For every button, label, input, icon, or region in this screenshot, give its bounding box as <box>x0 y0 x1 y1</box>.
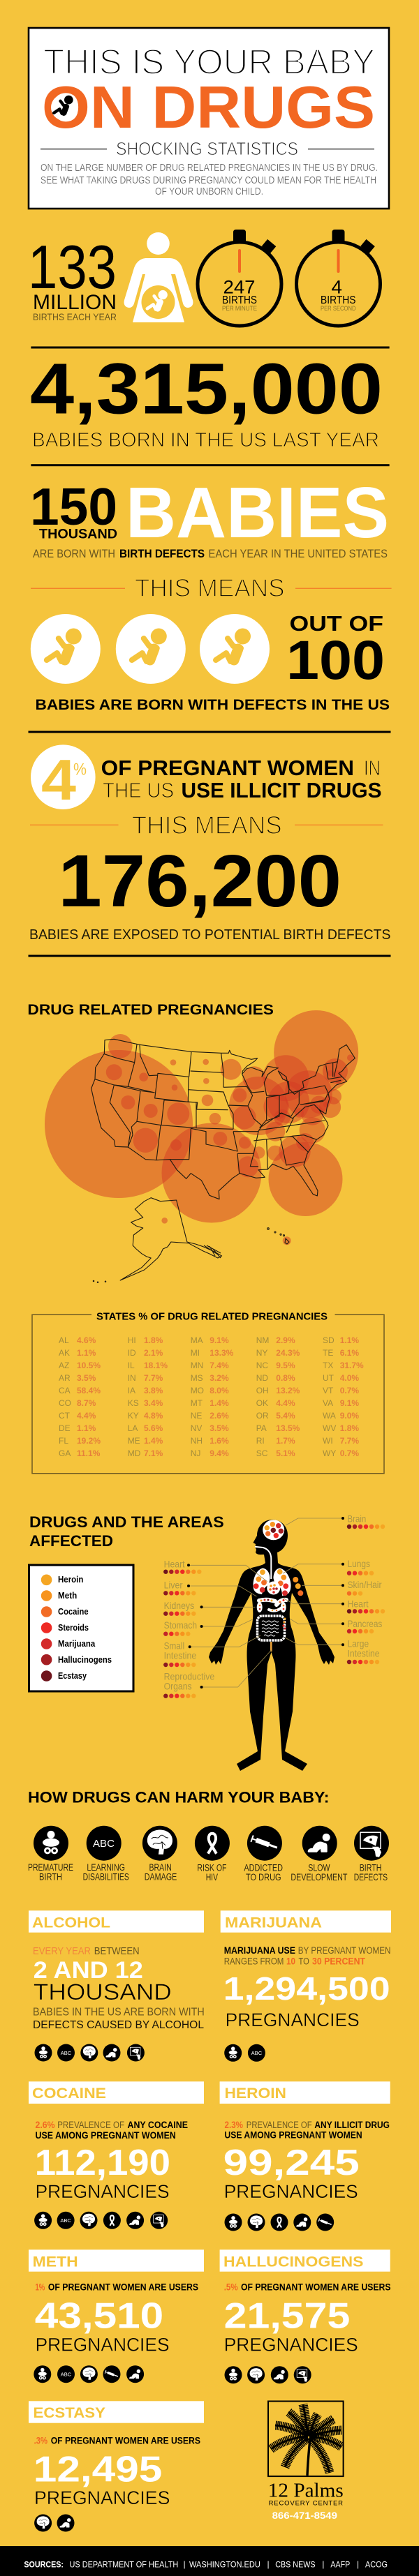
body figure with organs <box>209 1520 335 1771</box>
heading: this means: THIS MEANS <box>135 574 285 602</box>
stat: 150 thousand babies: BABIES <box>126 472 389 553</box>
panel: alcohol: DEFECTS CAUSED BY ALCOHOL <box>33 2019 204 2031</box>
column 1: 1.1% <box>77 1423 96 1433</box>
stat: out of 100: 100 <box>286 629 385 691</box>
column 4: 13.5% <box>276 1423 300 1433</box>
column 1: 11.1% <box>77 1448 101 1458</box>
column 3: NJ <box>191 1448 200 1458</box>
icon: birth defects <box>354 1826 389 1882</box>
panel: heroin: PREVALENCE OF <box>247 2120 312 2130</box>
icon: addicted to drug <box>244 1826 283 1882</box>
column 1: AK <box>59 1348 70 1358</box>
heading: drugs and the areas affected <box>29 1513 224 1550</box>
logo: 12 Palms Recovery Center: RECOVERY CENTER <box>269 2500 343 2508</box>
panel: marijuana: RANGES FROM <box>224 1956 284 1966</box>
icon: pregnant woman <box>124 232 193 322</box>
column 4: NC <box>256 1361 268 1370</box>
column 4: 1.7% <box>276 1436 295 1446</box>
lungs <box>253 1568 291 1596</box>
icon: premature birth: PREMATURE <box>28 1862 73 1873</box>
caption: babies born with defects: BABIES ARE BORN WITH DEFECTS IN THE US <box>35 696 390 713</box>
harm icons: ABC <box>61 2050 71 2056</box>
column 3: 9.1% <box>210 1335 229 1345</box>
harm icons <box>34 2515 74 2531</box>
stopwatch: 247 births per minute: PER MINUTE <box>222 305 257 313</box>
heart <box>267 1581 280 1595</box>
intro paragraph: OF YOUR UNBORN CHILD. <box>155 186 263 197</box>
callout: right side organ labels: Brain <box>348 1513 366 1525</box>
icon: birth defects: BIRTH <box>360 1863 381 1873</box>
icon: learning disabilities <box>83 1826 129 1882</box>
callout: right side organ labels: Large <box>348 1638 369 1649</box>
panel: drug legend: Heroin <box>58 1575 83 1585</box>
panel: ecstasy: OF PREGNANT WOMEN ARE USERS <box>51 2436 200 2446</box>
panel: drug legend: Marijuana <box>58 1639 96 1649</box>
column 2: KY <box>128 1411 139 1421</box>
icon: risk of HIV <box>195 1826 230 1882</box>
column 4: PA <box>256 1423 267 1433</box>
stopwatch: 247 births per minute: 247 <box>223 277 256 298</box>
statement: pregnant women use illicit drugs: OF PREGNANT WOMEN <box>101 756 354 780</box>
caption: birth defects: BIRTH DEFECTS <box>119 548 205 560</box>
heading: drugs and the areas affected: DRUGS AND THE AREAS <box>29 1513 224 1531</box>
icon: learning disabilities: ABC <box>93 1839 115 1850</box>
logo: 12 Palms Recovery Center <box>268 2402 344 2521</box>
column 5: WA <box>323 1411 336 1421</box>
panel: ecstasy: ECSTASY <box>34 2405 105 2421</box>
callout: left side organ labels: Reproductive <box>164 1671 214 1682</box>
panel: alcohol: BETWEEN <box>94 1945 140 1957</box>
column 5: WI <box>323 1436 333 1446</box>
panel: marijuana: 30 PERCENT <box>312 1956 366 1966</box>
column 3: 13.3% <box>210 1348 234 1358</box>
column 5: VA <box>323 1398 333 1408</box>
panel: marijuana <box>221 1910 391 2062</box>
panel: marijuana: PREGNANCIES <box>226 2009 360 2030</box>
callout: right side organ labels <box>341 1513 385 1664</box>
panel: alcohol: BABIES IN THE US ARE BORN WITH <box>33 2007 205 2019</box>
footer: sources: | <box>267 2559 270 2569</box>
stopwatch: 247 births per minute: BIRTHS <box>222 294 257 306</box>
column 2: 2.1% <box>144 1348 163 1358</box>
column 5: WY <box>323 1448 336 1458</box>
panel: ecstasy <box>29 2401 204 2531</box>
column 1: CO <box>59 1398 71 1408</box>
callout lines <box>189 1518 343 1687</box>
column 4: OR <box>256 1411 269 1421</box>
panel: state percentages table <box>32 1311 384 1474</box>
panel: drug legend: Meth <box>58 1591 77 1601</box>
panel: hallucinogens: HALLUCINOGENS <box>223 2254 363 2270</box>
column 3: 9.4% <box>210 1448 229 1458</box>
stat: 150 thousand babies: 150 <box>30 477 117 536</box>
panel: meth: OF PREGNANT WOMEN ARE USERS <box>48 2282 198 2293</box>
phone number: 866-471-8549 <box>272 2510 337 2521</box>
panel: heroin: PREGNANCIES <box>224 2181 358 2202</box>
column 5: WV <box>323 1423 336 1433</box>
column 4: OH <box>256 1386 269 1395</box>
column 1: 1.1% <box>77 1348 96 1358</box>
panel: cocaine: ANY COCAINE <box>127 2120 188 2130</box>
callout: left side organ labels <box>163 1559 214 1698</box>
stat: 4,315,000 babies: BABIES BORN IN THE US LAST YEAR <box>32 429 379 451</box>
logo wordmark: 12 Palms <box>268 2480 344 2501</box>
stat: 150 thousand babies: THOUSAND <box>39 527 117 541</box>
column 3: 3.5% <box>210 1423 229 1433</box>
column 1: AR <box>59 1373 71 1383</box>
column 5: 4.0% <box>340 1373 359 1383</box>
footer: sources <box>0 2546 419 2576</box>
icon: brain damage <box>142 1826 177 1882</box>
panel: cocaine: USE AMONG PREGNANT WOMEN <box>35 2130 176 2141</box>
panel: marijuana: TO <box>299 1956 309 1966</box>
column 1: GA <box>59 1448 71 1458</box>
icon: brain damage: DAMAGE <box>145 1871 177 1882</box>
harm icons <box>34 2212 168 2229</box>
icon: learning disabilities: LEARNING <box>87 1862 125 1873</box>
column 4: SC <box>256 1448 268 1458</box>
panel: cocaine: COCAINE <box>32 2085 106 2102</box>
icon: slow development: DEVELOPMENT <box>291 1872 348 1882</box>
footer: sources: | <box>183 2559 186 2569</box>
column 3: MI <box>191 1348 200 1358</box>
callout: left side organ labels: Liver <box>164 1580 183 1591</box>
stat: out of 100: OUT OF <box>289 611 383 636</box>
column 4: 5.1% <box>276 1448 295 1458</box>
panel: hallucinogens: PREGNANCIES <box>224 2334 358 2355</box>
caption: birth defects: ARE BORN WITH <box>33 548 115 560</box>
column 3: MN <box>191 1361 203 1370</box>
callout: right side organ labels: Intestine <box>348 1647 380 1658</box>
column 4: 2.9% <box>276 1335 295 1345</box>
harm icons: ABC <box>60 2217 71 2224</box>
panel: cocaine: 112,190 <box>35 2143 170 2183</box>
Alaska and Hawaii outlines <box>93 1198 289 1282</box>
panel: ecstasy: 12,495 <box>34 2450 162 2490</box>
panel: marijuana: BY PREGNANT WOMEN <box>298 1945 391 1956</box>
harm icons <box>34 2365 144 2383</box>
column 2: 3.4% <box>144 1398 163 1408</box>
heading: how drugs can harm your baby: HOW DRUGS CAN HARM YOUR BABY: <box>28 1788 330 1806</box>
column 1: FL <box>59 1436 68 1446</box>
callout: right side organ labels: Lungs <box>348 1558 370 1569</box>
title line: on drugs: ON DRUGS <box>42 75 375 141</box>
panel: heroin: 2.3% <box>225 2120 243 2130</box>
panel: heroin: 99,245 <box>223 2143 360 2183</box>
brain <box>263 1520 284 1540</box>
footer: sources: WASHINGTON.EDU <box>189 2559 260 2569</box>
column 2: 3.8% <box>144 1386 163 1395</box>
column 5: 31.7% <box>340 1361 364 1370</box>
callout: left side organ labels: Intestine <box>164 1650 196 1661</box>
title line: this is your baby: THIS IS YOUR BABY <box>43 42 375 82</box>
footer: sources: ACOG <box>365 2559 388 2569</box>
stat: 133 million births each year: MILLION <box>33 291 117 314</box>
panel: meth: 43,510 <box>35 2296 163 2337</box>
panel: hallucinogens: OF PREGNANT WOMEN ARE USERS <box>241 2282 391 2293</box>
column 2: 5.6% <box>144 1423 163 1433</box>
baby circles <box>31 614 270 684</box>
logo frame <box>268 2402 344 2476</box>
column 3: 1.4% <box>210 1398 229 1408</box>
statement: pregnant women use illicit drugs: THE US <box>103 779 174 802</box>
icon: slow development <box>291 1826 348 1882</box>
panel: hallucinogens: 21,575 <box>224 2296 350 2337</box>
caption: babies exposed: BABIES ARE EXPOSED TO POTENTIAL BIRTH DEFECTS <box>29 927 391 943</box>
column 5: 1.8% <box>340 1423 359 1433</box>
panel: ecstasy: .3% <box>34 2436 47 2446</box>
panel: cocaine <box>29 2081 204 2229</box>
intro paragraph <box>41 162 378 197</box>
callout: right side organ labels: Heart <box>348 1598 369 1609</box>
column 5: 7.7% <box>340 1436 359 1446</box>
column 4: 9.5% <box>276 1361 295 1370</box>
windpipe <box>255 1547 271 1579</box>
column 5: 9.1% <box>340 1398 359 1408</box>
column 2: ID <box>128 1348 136 1358</box>
stat: 133 million births each year <box>28 232 117 322</box>
stat: 176,200: 176,200 <box>58 840 341 922</box>
column 2: IN <box>128 1373 136 1383</box>
badge: 4 percent <box>31 744 96 812</box>
stopwatch: 4 births per second: 4 <box>331 277 342 298</box>
badge: 4 percent: 4 <box>41 747 76 812</box>
icon: baby in the letter O <box>54 96 73 114</box>
column 2: IL <box>128 1361 135 1370</box>
icon: slow development: SLOW <box>308 1863 330 1873</box>
harm icons <box>35 2044 145 2061</box>
panel: drug legend: Steroids <box>58 1623 89 1633</box>
harm icons <box>225 2213 334 2231</box>
panel: marijuana: 1,294,500 <box>223 1970 390 2007</box>
header panel <box>29 28 389 209</box>
column 5: 0.7% <box>340 1386 359 1395</box>
column 5: TE <box>323 1348 333 1358</box>
icon row: harms <box>28 1826 389 1882</box>
icon: addicted to drug: ADDICTED <box>244 1863 283 1873</box>
column 4: NM <box>256 1335 269 1345</box>
icon: risk of HIV: HIV <box>206 1872 218 1882</box>
column 4: 5.4% <box>276 1411 295 1421</box>
icon: risk of HIV: RISK OF <box>197 1863 226 1873</box>
footer: sources: | <box>357 2559 359 2569</box>
callout: left side organ labels: Heart <box>164 1559 185 1570</box>
column 4 <box>256 1335 300 1458</box>
statement: pregnant women use illicit drugs: USE ILLICIT DRUGS <box>182 779 381 802</box>
column 2: MD <box>128 1448 141 1458</box>
column 5: 9.0% <box>340 1411 359 1421</box>
column 4: 4.4% <box>276 1398 295 1408</box>
stopwatch: 247 births per minute <box>198 230 281 326</box>
column 3: NV <box>191 1423 202 1433</box>
panel: hallucinogens <box>220 2249 391 2383</box>
subtitle: shocking statistics: SHOCKING STATISTICS <box>116 138 298 159</box>
panel: marijuana: MARIJUANA USE <box>224 1945 295 1956</box>
icon: addicted to drug: TO DRUG <box>246 1872 281 1882</box>
callout: right side organ labels: Skin/Hair <box>348 1579 382 1590</box>
panel: alcohol: THOUSAND <box>34 1979 172 2005</box>
column 2: 4.8% <box>144 1411 163 1421</box>
footer: sources: SOURCES: <box>24 2559 64 2569</box>
column 3: MA <box>191 1335 203 1345</box>
panel: cocaine: 2.6% <box>35 2120 54 2130</box>
icon: learning disabilities: DISABILITIES <box>83 1871 129 1882</box>
stopwatch: 4 births per second: BIRTHS <box>321 294 356 306</box>
heading: drugs and the areas affected: AFFECTED <box>29 1532 113 1550</box>
bubbles by state <box>45 1010 358 1245</box>
column 5: 1.1% <box>340 1335 359 1345</box>
statement: pregnant women use illicit drugs <box>101 756 381 802</box>
column 5: TX <box>323 1361 333 1370</box>
column 2: 1.8% <box>144 1335 163 1345</box>
panel: drug legend: Cocaine <box>58 1607 89 1617</box>
footer: sources: AAFP <box>330 2559 350 2569</box>
callout: left side organ labels: Organs <box>164 1681 192 1692</box>
heading: this means: THIS MEANS <box>132 811 282 839</box>
callout: left side organ labels: Stomach <box>164 1619 197 1631</box>
panel: cocaine: PREVALENCE OF <box>57 2120 124 2130</box>
column 5: UT <box>323 1373 335 1383</box>
column 4: ND <box>256 1373 268 1383</box>
panel: cocaine: PREGNANCIES <box>35 2181 170 2202</box>
column 5: VT <box>323 1386 334 1395</box>
column 3: 7.4% <box>210 1361 229 1370</box>
column 3: MO <box>191 1386 204 1395</box>
stopwatch: 4 births per second <box>296 230 380 326</box>
callout: right side organ labels: Pancreas <box>348 1618 382 1629</box>
column 1: 4.4% <box>77 1411 96 1421</box>
column 1 <box>59 1335 101 1458</box>
column 3: MT <box>191 1398 203 1408</box>
column 4: RI <box>256 1436 265 1446</box>
stopwatch: 4 births per second: PER SECOND <box>321 305 356 313</box>
panel: heroin: USE AMONG PREGNANT WOMEN <box>225 2129 362 2141</box>
column 3: 3.2% <box>210 1373 229 1383</box>
panel: heroin: ANY ILLICIT DRUG <box>314 2120 390 2130</box>
caption: birth defects <box>33 548 388 560</box>
icon: brain damage: BRAIN <box>149 1862 172 1873</box>
column 5: SD <box>323 1335 335 1345</box>
column 5: 0.7% <box>340 1448 359 1458</box>
callout: left side organ labels: Small <box>164 1640 184 1651</box>
panel: alcohol: EVERY YEAR <box>33 1945 91 1957</box>
panel: marijuana: MARIJUANA <box>225 1915 322 1931</box>
column 1: 58.4% <box>77 1386 101 1395</box>
panel: meth <box>29 2249 204 2383</box>
stat: 133 million births each year: BIRTHS EACH YEAR <box>33 311 117 322</box>
column 2: 18.1% <box>144 1361 168 1370</box>
harm icons: ABC <box>61 2371 71 2377</box>
panel: meth: METH <box>33 2254 78 2270</box>
panel: hallucinogens: .5% <box>224 2282 238 2293</box>
state outlines <box>91 1039 355 1199</box>
column 3: 1.6% <box>210 1436 229 1446</box>
column 1: DE <box>59 1423 71 1433</box>
stat: 4,315,000 babies: 4,315,000 <box>30 349 383 428</box>
column 5: 6.1% <box>340 1348 359 1358</box>
icon: premature birth: BIRTH <box>39 1871 62 1882</box>
table title: STATES % OF DRUG RELATED PREGNANCIES <box>96 1311 328 1323</box>
panel: marijuana: 10 <box>286 1956 295 1966</box>
column 2: HI <box>128 1335 136 1345</box>
column 3: NH <box>191 1436 203 1446</box>
panel: alcohol: 2 AND 12 <box>34 1957 143 1984</box>
liver, stomach, kidneys and pancreas <box>257 1599 286 1612</box>
column 1: 4.6% <box>77 1335 96 1345</box>
skin dots on arm <box>293 1577 303 1596</box>
harm icons: ABC <box>251 2050 262 2056</box>
column 1: CA <box>59 1386 71 1395</box>
panel: meth: 1% <box>35 2282 45 2293</box>
panel: alcohol <box>29 1910 205 2061</box>
column 3: 2.6% <box>210 1411 229 1421</box>
column 4: 0.8% <box>276 1373 295 1383</box>
footer: sources: | <box>322 2559 324 2569</box>
footer: sources: US DEPARTMENT OF HEALTH <box>70 2559 178 2569</box>
column 2: KS <box>128 1398 139 1408</box>
column 1: 8.7% <box>77 1398 96 1408</box>
column 2: LA <box>128 1423 138 1433</box>
column 4: NY <box>256 1348 267 1358</box>
icon: birth defects: DEFECTS <box>354 1872 388 1882</box>
panel: drug legend <box>29 1565 133 1691</box>
harm icons <box>225 2366 311 2383</box>
column 1: AL <box>59 1335 69 1345</box>
column 3 <box>191 1335 234 1458</box>
harm icons <box>224 2044 265 2062</box>
column 4: 24.3% <box>276 1348 300 1358</box>
column 3: 8.0% <box>210 1386 229 1395</box>
column 1: CT <box>59 1411 71 1421</box>
column 2: 7.7% <box>144 1373 163 1383</box>
column 2: 7.1% <box>144 1448 163 1458</box>
column 2: IA <box>128 1386 135 1395</box>
column 3: MS <box>191 1373 203 1383</box>
badge: 4 percent: % <box>73 761 87 779</box>
statement: pregnant women use illicit drugs: IN <box>364 756 381 780</box>
heading: drug related pregnancies: DRUG RELATED PREGNANCIES <box>27 1001 274 1018</box>
column 4: 13.2% <box>276 1386 300 1395</box>
column 1: 10.5% <box>77 1361 101 1370</box>
map: US states with drug bubbles <box>45 1010 358 1282</box>
footer: sources: CBS NEWS <box>275 2559 316 2569</box>
body silhouette <box>209 1520 335 1771</box>
panel: ecstasy: PREGNANCIES <box>34 2487 170 2508</box>
panel: heroin <box>220 2081 390 2231</box>
column 3: NE <box>191 1411 202 1421</box>
caption: birth defects: EACH YEAR IN THE UNITED STATES <box>208 548 388 560</box>
panel: drug legend: Hallucinogens <box>58 1655 112 1665</box>
intestines <box>257 1616 286 1652</box>
icon: palm tree <box>271 2404 341 2476</box>
column 1: AZ <box>59 1361 69 1370</box>
column 1: 19.2% <box>77 1436 101 1446</box>
panel: drug legend: Ecstasy <box>58 1671 87 1681</box>
column 2 <box>128 1335 168 1458</box>
column 5 <box>323 1335 364 1458</box>
panel: heroin: HEROIN <box>225 2085 286 2102</box>
callout: left side organ labels: Kidneys <box>164 1600 194 1611</box>
panel: meth: PREGNANCIES <box>35 2334 170 2355</box>
column 4: OK <box>256 1398 268 1408</box>
column 2: ME <box>128 1436 140 1446</box>
stat: 133 million births each year: 133 <box>28 232 117 301</box>
column 1: 3.5% <box>77 1373 96 1383</box>
panel: alcohol: ALCOHOL <box>32 1915 110 1931</box>
icon: premature birth <box>28 1826 73 1882</box>
column 2: 1.4% <box>144 1436 163 1446</box>
